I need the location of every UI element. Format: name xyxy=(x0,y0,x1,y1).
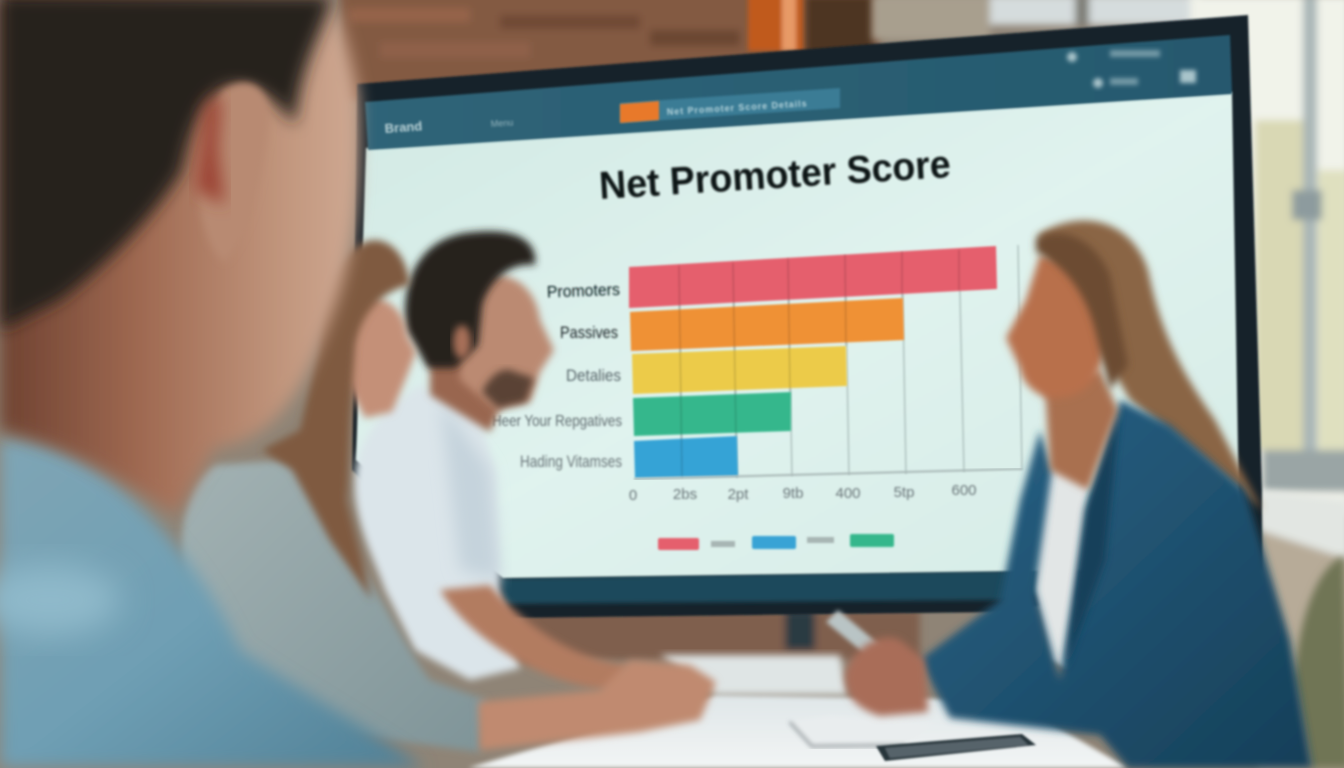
bar: promoters xyxy=(629,246,997,308)
woman: face xyxy=(345,297,416,418)
screen xyxy=(356,92,1240,578)
legend: second grey text xyxy=(807,537,834,543)
axis tick labels: 400 xyxy=(835,485,861,502)
foreground person: shirt xyxy=(0,438,425,768)
chart legend xyxy=(658,534,894,550)
chart grid lines xyxy=(679,245,1022,478)
monitor xyxy=(352,15,1262,618)
presenter: face xyxy=(1006,255,1105,398)
man: face xyxy=(460,275,554,410)
man in white shirt xyxy=(355,231,628,690)
header orange button xyxy=(620,101,659,123)
header status icons xyxy=(1067,50,1196,88)
label: promoters: Promoters xyxy=(547,280,620,302)
legend: green swatch xyxy=(850,534,894,547)
monitor bezel xyxy=(352,15,1262,618)
woman: top xyxy=(181,460,486,752)
background: brick wall xyxy=(340,0,880,100)
bar: blue segment xyxy=(634,436,738,478)
foreground person: red ear shadow xyxy=(195,95,225,205)
bar chart xyxy=(492,245,1022,550)
presenter woman xyxy=(826,221,1312,768)
title: Net Promoter Score xyxy=(598,143,952,208)
window sill and lower wall xyxy=(1258,490,1344,768)
header tab highlight xyxy=(620,88,840,123)
man: shirt shading xyxy=(440,400,500,580)
woman: hand and forearm xyxy=(478,660,716,750)
presenter: hair back xyxy=(1038,221,1262,510)
table xyxy=(468,695,1128,768)
screen header bar xyxy=(365,35,1232,150)
label: passives: Passives xyxy=(560,323,618,342)
presenter: handheld phone xyxy=(826,610,888,660)
bar: respondents xyxy=(633,392,791,436)
chart axis line xyxy=(634,469,1022,479)
notebook on table xyxy=(790,716,935,746)
header menu text: Menu xyxy=(490,117,514,129)
monitor stand xyxy=(520,610,920,660)
label: details: Detalies xyxy=(566,366,621,385)
presenter: lapel fold xyxy=(1065,405,1120,670)
axis tick labels: 9tb xyxy=(783,485,803,502)
man: shirt xyxy=(355,385,520,680)
foreground person: neck and face xyxy=(0,0,359,515)
axis tick labels: 0 xyxy=(629,487,637,504)
smartphone on table xyxy=(876,734,1036,761)
foreground person: shirt highlight xyxy=(0,565,120,635)
foreground person: ear xyxy=(199,83,269,262)
man: hair xyxy=(405,231,535,368)
axis tick labels: 2bs xyxy=(673,486,697,503)
foreground person: hair xyxy=(0,0,332,330)
window with greenery xyxy=(1190,0,1344,515)
presenter: hair front xyxy=(1036,233,1128,390)
woman: hair xyxy=(262,240,410,600)
axis tick labels: 5tp xyxy=(894,484,914,501)
presenter: blazer xyxy=(920,400,1312,768)
chair at right edge xyxy=(1294,556,1344,768)
presenter: hands xyxy=(845,637,928,716)
man: forearm xyxy=(440,585,628,690)
axis tick labels: 600 xyxy=(951,482,977,499)
keyboard on table xyxy=(660,655,848,695)
man: neck xyxy=(430,340,505,432)
background: pale wall segment xyxy=(872,0,1200,40)
header tab text: Net Promoter Score Details xyxy=(667,98,807,117)
background: orange cylinder xyxy=(748,0,803,51)
header logo text: Brand xyxy=(384,118,423,136)
axis tick labels xyxy=(629,482,977,504)
legend: red swatch xyxy=(658,538,699,550)
bar: passives xyxy=(630,298,904,351)
monitor bottom edge xyxy=(500,566,1240,604)
man: beard xyxy=(482,370,534,408)
grid lines over bars xyxy=(679,250,959,476)
presenter: blouse xyxy=(1034,470,1090,670)
legend: first grey text xyxy=(711,541,735,547)
foreground person xyxy=(0,0,425,768)
woman with long hair xyxy=(181,240,716,752)
man: ear xyxy=(453,325,471,359)
label: blue bar: Hading Vitamses xyxy=(520,452,622,471)
legend: blue swatch xyxy=(752,536,796,549)
label: respondents: Heer Your Repgatives xyxy=(492,413,622,430)
presenter: neck xyxy=(1045,370,1118,490)
bar: details xyxy=(632,346,847,394)
axis tick labels: 2pt xyxy=(728,486,749,503)
